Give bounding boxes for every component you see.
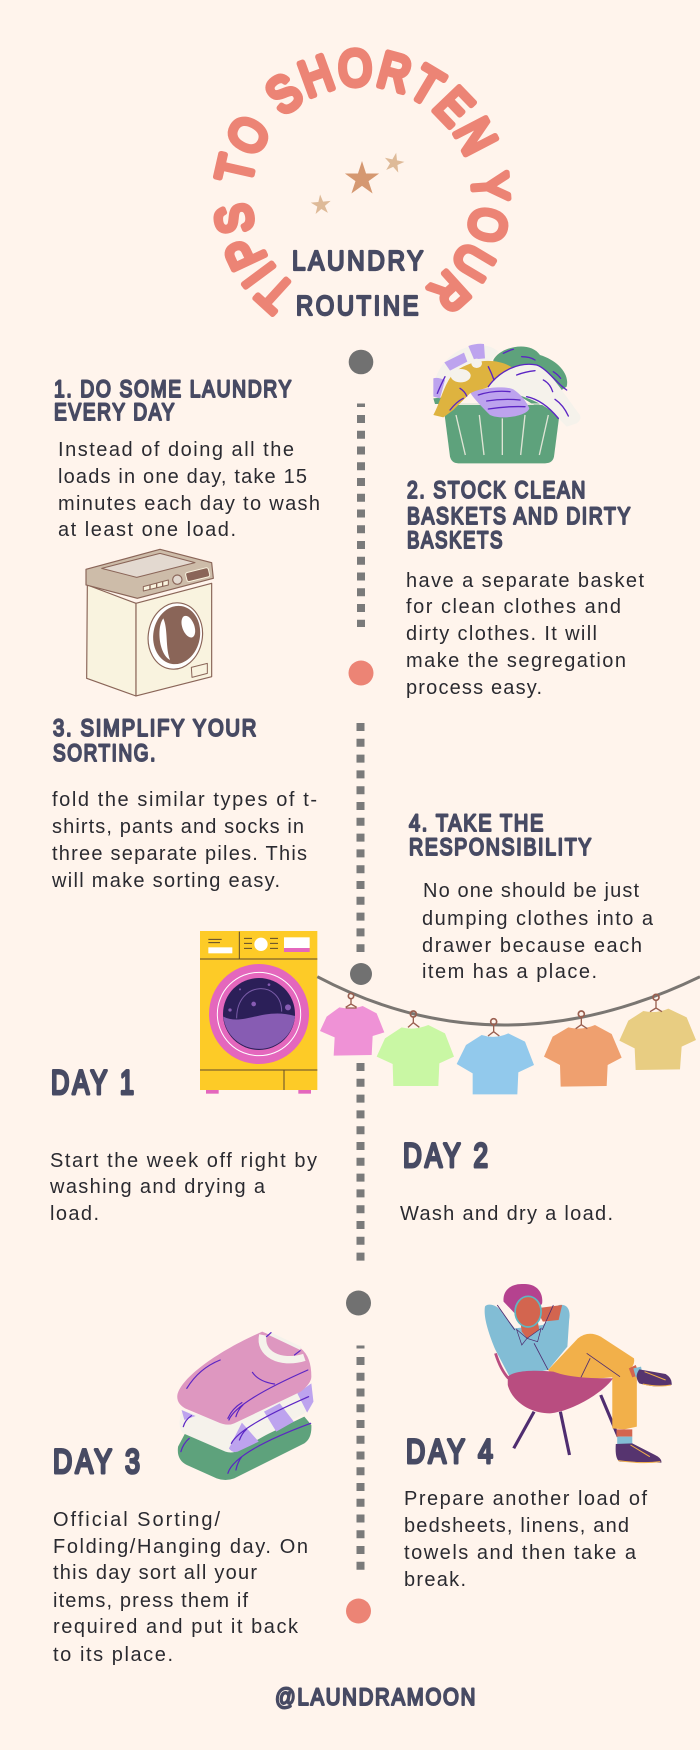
icon: beige washing machine (86, 549, 213, 696)
icon: yellow washing machine (200, 931, 317, 1094)
text: day 4 (404, 1488, 647, 1591)
heading: tip 3 (53, 715, 258, 767)
heading: day 2: DAY 2 (403, 1137, 491, 1175)
subtitle: ROUTINE (296, 290, 421, 321)
text: tip 3: three separate piles. This (52, 843, 307, 865)
icon: stars (310, 151, 406, 214)
text: tip 4: dumping clothes into a (422, 908, 654, 930)
heading: tip 2: BASKETS AND DIRTY (407, 503, 632, 530)
clothesline (317, 977, 700, 1025)
text: day 3: items, press them if (53, 1590, 248, 1612)
text: tip 2: dirty clothes. It will (406, 623, 597, 645)
text: day 1 (49, 1150, 317, 1225)
panel: day 4 (404, 1433, 647, 1591)
icon: relaxing person in chair (485, 1284, 672, 1463)
text: day 3: required and put it back (53, 1616, 299, 1638)
text: day 3: this day sort all your (53, 1562, 257, 1584)
footer handle: @LAUNDRAMOON (275, 1684, 477, 1711)
text: day 1: load. (50, 1203, 99, 1225)
text: tip 3: will make sorting easy. (51, 870, 280, 892)
timeline dots (346, 350, 374, 1624)
text: tip 2 (406, 570, 644, 699)
text: day 3 (53, 1509, 308, 1666)
text: tip 4 (422, 880, 654, 983)
heading: day 3: DAY 3 (53, 1443, 143, 1481)
timeline (346, 350, 374, 1624)
text: tip 2: have a separate basket (406, 570, 644, 592)
text: day 4: break. (404, 1569, 466, 1591)
heading: tip 1: EVERY DAY (54, 399, 176, 426)
text: tip 3 (51, 789, 317, 892)
panel: day 1 (49, 1064, 317, 1225)
text: day 3: to its place. (53, 1644, 173, 1666)
panel: day 3 (53, 1443, 308, 1666)
title (213, 47, 512, 321)
heading: tip 1 (54, 376, 293, 426)
text: tip 3: fold the similar types of t- (52, 789, 317, 811)
text: day 4: towels and then take a (404, 1542, 637, 1564)
text: day 2: Wash and dry a load. (400, 1203, 613, 1225)
curved heading: TIPS TO SHORTEN YOUR (213, 47, 512, 317)
subtitle: LAUNDRY (292, 245, 426, 276)
icon: stack of folded clothes (177, 1332, 313, 1480)
text: tip 1 (58, 439, 320, 541)
panel: tip 3 (51, 715, 317, 892)
panel: day 2 (400, 1137, 613, 1225)
heading: day 1: DAY 1 (51, 1064, 137, 1102)
panel: tip 4 (409, 810, 654, 983)
heading: tip 3: SORTING. (53, 740, 157, 767)
text: day 4: bedsheets, linens, and (404, 1515, 629, 1537)
heading: tip 2 (407, 477, 632, 554)
text: tip 2: process easy. (406, 677, 542, 699)
heading: day 4: DAY 4 (406, 1433, 496, 1471)
icon: laundry basket (433, 344, 580, 463)
heading: tip 4: RESPONSIBILITY (409, 834, 593, 861)
text: day 1: washing and drying a (49, 1176, 266, 1198)
heading: tip 2: BASKETS (407, 527, 504, 554)
text: tip 4: drawer because each (422, 935, 642, 957)
text: tip 2: make the segregation (406, 650, 626, 672)
heading: tip 1: 1. DO SOME LAUNDRY (54, 376, 293, 403)
panel: tip 2 (406, 344, 644, 699)
heading: tip 3: 3. SIMPLIFY YOUR (53, 715, 258, 742)
text: tip 1: at least one load. (58, 519, 236, 541)
text: day 1: Start the week off right by (50, 1150, 317, 1172)
subtitle (292, 245, 426, 321)
text: tip 3: shirts, pants and socks in (52, 816, 304, 838)
text: tip 2: for clean clothes and (406, 596, 621, 618)
text: day 3: Folding/Hanging day. On (53, 1536, 308, 1558)
heading: tip 2: 2. STOCK CLEAN (407, 477, 587, 504)
heading: tip 4: 4. TAKE THE (409, 810, 545, 837)
text: tip 4: item has a place. (422, 961, 597, 983)
text: tip 1: Instead of doing all the (58, 439, 294, 461)
text: tip 4: No one should be just (423, 880, 639, 902)
text: day 4: Prepare another load of (404, 1488, 647, 1510)
text: tip 1: minutes each day to wash (58, 493, 320, 515)
illustration: washer and clothesline (200, 931, 700, 1094)
hangers (346, 993, 662, 1036)
heading: tip 4 (409, 810, 593, 861)
text: day 3: Official Sorting/ (53, 1509, 220, 1531)
t-shirts (320, 1006, 696, 1094)
panel: tip 1 (54, 376, 320, 696)
text: tip 1: loads in one day, take 15 (58, 466, 307, 488)
